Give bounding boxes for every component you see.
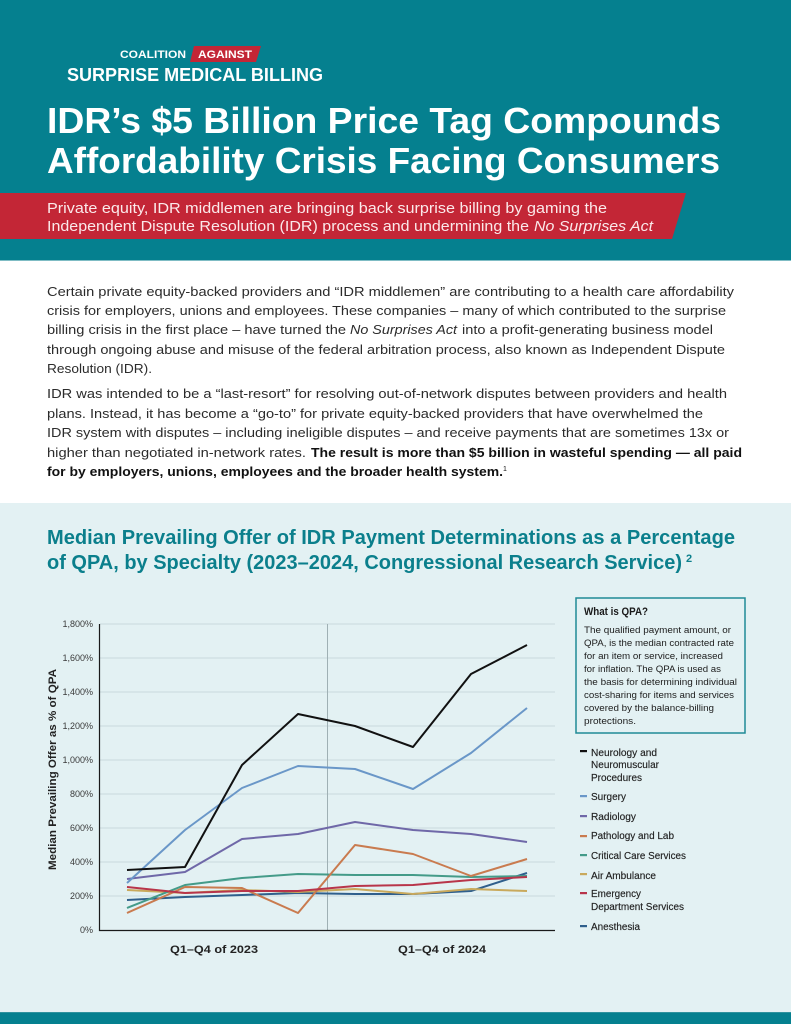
chart heading	[47, 527, 735, 574]
chart panel background	[0, 503, 791, 1012]
y-axis labels: 800%	[70, 789, 93, 799]
header band	[0, 0, 791, 261]
callout: What is QPA?: covered by the balance-billing	[584, 703, 714, 714]
legend: Neurology and Neuromuscular Procedures: Neuromuscular	[591, 760, 660, 771]
second paragraph: plans. Instead, it has become a “go-to” for private equity-backed providers that have overwhelmed the	[47, 406, 703, 421]
y-axis labels	[62, 619, 93, 935]
second paragraph: for by employers, unions, employees and the broader health system.	[47, 464, 503, 479]
legend: Emergency Department Services	[580, 889, 684, 913]
intro paragraph	[47, 284, 734, 376]
subtitle banner	[0, 193, 686, 239]
callout: What is QPA?: for inflation. The QPA is used as	[584, 664, 721, 675]
chart heading: of QPA, by Specialty (2023–2024, Congressional Research Service)	[47, 552, 682, 574]
y-axis labels: 1,000%	[62, 755, 93, 765]
series: Anesthesia	[127, 873, 527, 900]
series: Emergency Department Services	[127, 877, 527, 893]
callout: What is QPA?: cost-sharing for items and services	[584, 690, 734, 701]
y-axis labels: 1,600%	[62, 653, 93, 663]
second paragraph: IDR system with disputes – including ineligible disputes – and receive payments that are sometimes 13x or	[47, 425, 730, 440]
legend: Neurology and Neuromuscular Procedures: Neurology and	[591, 748, 657, 759]
intro paragraph: Resolution (IDR).	[47, 361, 152, 376]
second paragraph	[47, 386, 742, 479]
second paragraph: The result is more than $5 billion in wasteful spending — all paid	[311, 445, 742, 460]
y-axis labels: 1,400%	[62, 687, 93, 697]
intro paragraph: billing crisis in the first place – have turned the	[47, 322, 346, 337]
second paragraph: IDR was intended to be a “last-resort” for resolving out-of-network disputes between providers and health	[47, 386, 727, 401]
series: Surgery	[127, 708, 527, 883]
legend: Anesthesia: Anesthesia	[591, 922, 640, 933]
series: Radiology	[127, 822, 527, 879]
intro paragraph: into a profit-generating business model	[462, 322, 713, 337]
chart heading: Median Prevailing Offer of IDR Payment Determinations as a Percentage	[47, 527, 735, 549]
y-axis labels: 1,200%	[62, 721, 93, 731]
legend: Surgery: Surgery	[591, 792, 626, 803]
y-axis labels: 0%	[80, 925, 93, 935]
logo: Coalition Against Surprise Medical Billing: COALITION	[120, 49, 186, 61]
series: Air Ambulance	[127, 889, 527, 894]
legend: Neurology and Neuromuscular Procedures: Procedures	[591, 773, 642, 784]
callout: What is QPA?: What is QPA?	[584, 606, 648, 618]
legend: Radiology: Radiology	[591, 812, 636, 823]
series: Neurology and Neuromuscular Procedures	[127, 645, 527, 870]
legend: Critical Care Services: Critical Care Services	[591, 851, 686, 862]
callout: What is QPA?: the basis for determining individual	[584, 677, 737, 688]
legend: Emergency Department Services: Emergency	[591, 889, 641, 900]
second paragraph: higher than negotiated in-network rates.	[47, 445, 306, 460]
callout: What is QPA?: protections.	[584, 716, 636, 727]
subtitle banner: Independent Dispute Resolution (IDR) process and undermining the	[47, 218, 529, 235]
y-axis labels: 600%	[70, 823, 93, 833]
legend: Emergency Department Services: Department Services	[591, 902, 684, 913]
series: Critical Care Services	[127, 874, 527, 908]
second paragraph: 1	[503, 466, 507, 473]
callout: What is QPA?: QPA, is the median contracted rate	[584, 638, 734, 649]
x-axis label 2024: Q1–Q4 of 2024	[398, 944, 487, 956]
subtitle banner: No Surprises Act	[534, 218, 654, 235]
logo: Coalition Against Surprise Medical Billing: AGAINST	[198, 49, 252, 61]
subtitle banner: Private equity, IDR middlemen are bringing back surprise billing by gaming the	[47, 200, 607, 217]
y-axis labels: 1,800%	[62, 619, 93, 629]
intro paragraph: Certain private equity-backed providers and “IDR middlemen” are contributing to a health care affordability	[47, 284, 734, 299]
callout: What is QPA?: for an item or service, increased	[584, 651, 723, 662]
legend: Pathology and Lab: Pathology and Lab	[591, 831, 674, 842]
footer band	[0, 1012, 791, 1024]
legend	[580, 748, 686, 933]
x-axis label 2023: Q1–Q4 of 2023	[170, 944, 258, 956]
title	[47, 100, 721, 181]
title: IDR’s $5 Billion Price Tag Compounds	[47, 100, 721, 141]
y-axis labels: 400%	[70, 857, 93, 867]
line chart	[47, 619, 555, 956]
intro paragraph: through ongoing abuse and misuse of the federal arbitration process, also known as Independent Dispute	[47, 342, 725, 357]
legend: Air Ambulance: Air Ambulance	[591, 871, 656, 882]
legend: Neurology and Neuromuscular Procedures	[580, 748, 660, 784]
chart heading: 2	[686, 553, 692, 565]
intro paragraph: No Surprises Act	[350, 322, 458, 337]
logo: Coalition Against Surprise Medical Billing	[67, 46, 323, 85]
series: Pathology and Lab	[127, 845, 527, 913]
y-axis labels: 200%	[70, 891, 93, 901]
callout: What is QPA?: The qualified payment amount, or	[584, 625, 732, 636]
y-axis title: Median Prevailing Offer as % of QPA	[47, 669, 59, 870]
callout: What is QPA?	[576, 598, 745, 733]
intro paragraph: crisis for employers, unions and employees. These companies – many of which contributed to the surprise	[47, 303, 726, 318]
title: Affordability Crisis Facing Consumers	[47, 140, 720, 181]
logo: Coalition Against Surprise Medical Billing: SURPRISE MEDICAL BILLING	[67, 65, 323, 85]
